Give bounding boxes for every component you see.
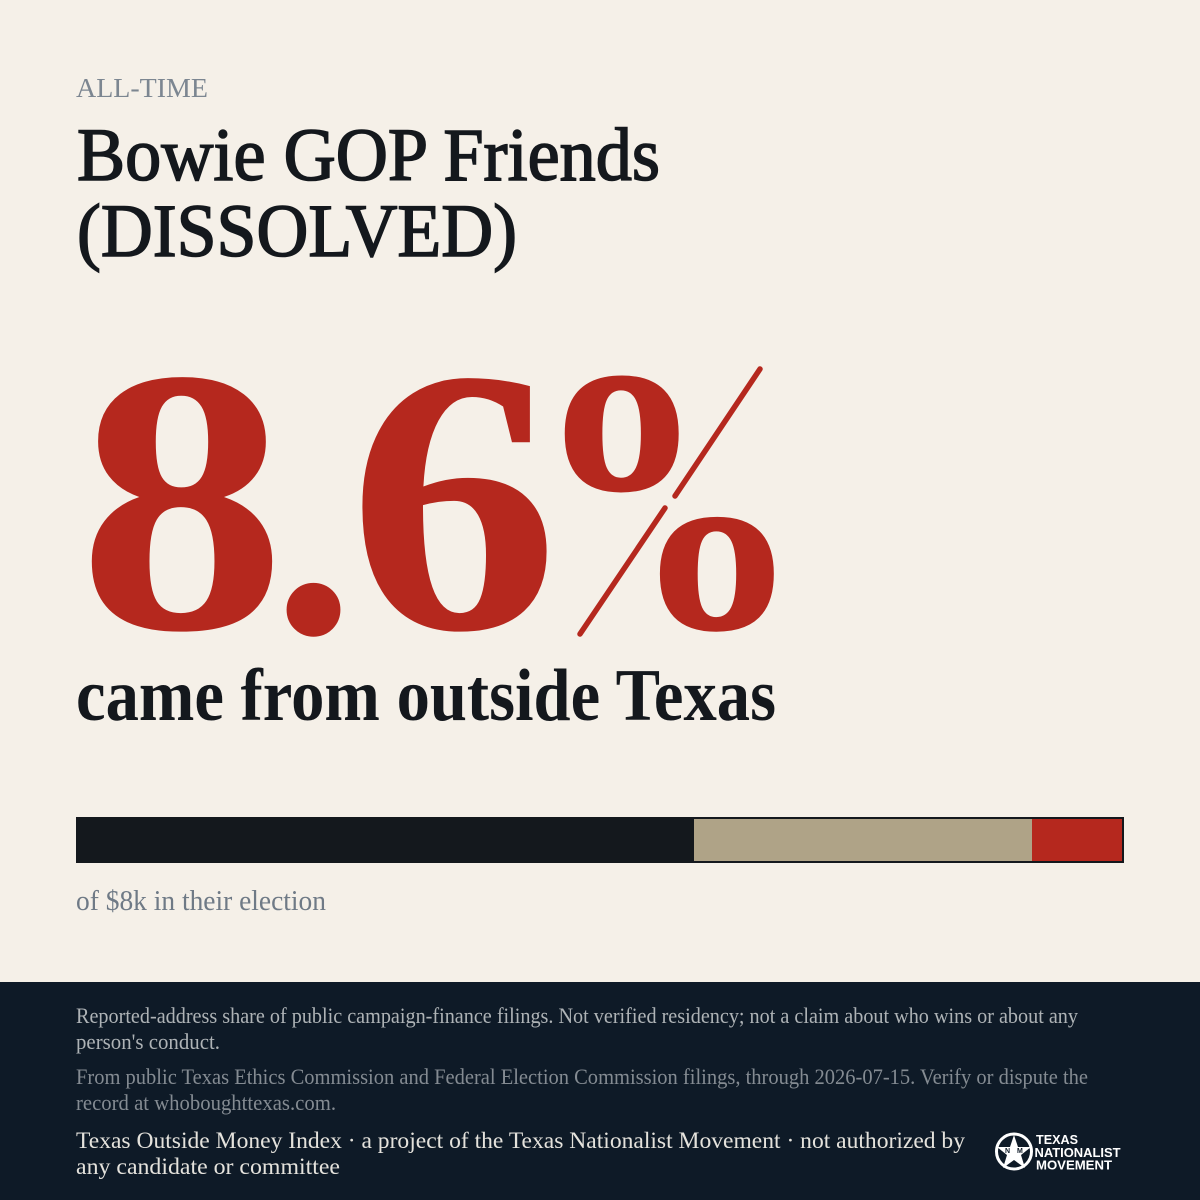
- bar caption: of $8k in their election: [76, 885, 326, 917]
- big percentage: %: [528, 303, 886, 661]
- disclaimer text: [76, 1003, 1078, 1054]
- source text: From public Texas Ethics Commission and Federal Election Commission filings, through 2026-07-15. Verify or dispute the: [76, 1064, 1088, 1089]
- icon: star in circle: N: [1005, 1148, 1010, 1155]
- icon: star in circle: [996, 1134, 1032, 1169]
- big percentage: %: [449, 345, 807, 697]
- bar segment: middle: [694, 819, 1032, 861]
- logo wordmark: [1034, 1133, 1121, 1172]
- attribution text: any candidate or committee: [76, 1154, 340, 1179]
- footer panel: [0, 982, 1200, 1200]
- attribution text: [76, 1128, 965, 1179]
- big percentage: 6: [348, 291, 559, 710]
- big percentage: [92, 366, 774, 637]
- disclaimer text: person's conduct.: [76, 1029, 220, 1054]
- subtitle: came from outside Texas: [76, 655, 776, 737]
- logo wordmark: MOVEMENT: [1036, 1158, 1112, 1172]
- disclaimer text: Reported-address share of public campaign-finance filings. Not verified residency; not a claim about who wins or about any: [76, 1003, 1078, 1028]
- eyebrow label: ALL-TIME: [76, 73, 208, 103]
- attribution text: Texas Outside Money Index · a project of the Texas Nationalist Movement · not authorized by: [76, 1128, 965, 1153]
- title: (DISSOLVED): [77, 190, 517, 273]
- title: Bowie GOP Friends: [77, 114, 660, 197]
- icon: star in circle: M: [1017, 1148, 1023, 1155]
- big percentage: .: [272, 336, 355, 704]
- bar segment: outside Texas: [1032, 819, 1122, 861]
- big percentage: 8: [78, 292, 286, 710]
- source text: record at whoboughttexas.com.: [76, 1090, 336, 1115]
- logo: Texas Nationalist Movement: [996, 1133, 1121, 1172]
- logo wordmark: TEXAS: [1036, 1133, 1078, 1147]
- source text: [76, 1064, 1088, 1115]
- title: [77, 114, 660, 273]
- logo wordmark: NATIONALIST: [1034, 1146, 1121, 1160]
- stacked share bar: [76, 817, 1124, 863]
